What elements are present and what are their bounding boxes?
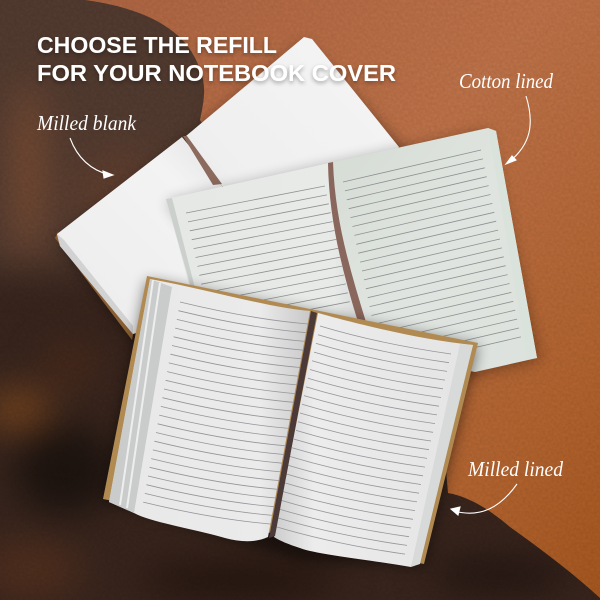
shadow bbox=[57, 42, 405, 342]
kraft cover edge bbox=[55, 232, 134, 340]
dark spine bbox=[269, 311, 317, 538]
right page bbox=[274, 313, 473, 567]
shadow bbox=[103, 280, 478, 566]
arrow: to cotton lined notebook bbox=[506, 96, 530, 164]
label text: Milled lined bbox=[467, 457, 563, 481]
label text: Cotton lined bbox=[459, 69, 553, 93]
right page fore edge bbox=[488, 128, 537, 359]
label text: Milled blank bbox=[36, 111, 137, 135]
right page rules bbox=[274, 326, 451, 554]
label: Cotton lined bbox=[459, 69, 553, 164]
left page rules bbox=[186, 186, 350, 329]
arrow: to milled lined notebook bbox=[451, 484, 517, 515]
label: Milled lined bbox=[451, 457, 563, 515]
right page bbox=[186, 37, 399, 260]
right page stacked edge bbox=[411, 344, 473, 567]
notebook: cotton lined bbox=[166, 128, 540, 376]
left page rules bbox=[143, 302, 308, 524]
leather spine bbox=[328, 162, 366, 322]
title line 2: FOR YOUR NOTEBOOK COVER bbox=[37, 60, 396, 86]
arrow: to milled blank notebook bbox=[70, 138, 113, 178]
left page stacked edge bbox=[109, 279, 172, 513]
left page bbox=[166, 163, 364, 345]
notebook: milled blank bbox=[55, 37, 405, 342]
shadow bbox=[166, 130, 540, 376]
left page edge highlights bbox=[120, 280, 160, 508]
title line 1: CHOOSE THE REFILL bbox=[37, 32, 277, 58]
right page bbox=[329, 128, 537, 372]
leather spine bbox=[183, 136, 222, 185]
page block edge bbox=[57, 234, 133, 334]
left page bbox=[57, 137, 250, 334]
left page bbox=[109, 279, 310, 541]
label: Milled blank bbox=[36, 111, 137, 178]
title bbox=[37, 32, 396, 86]
right page rules bbox=[343, 150, 521, 369]
kraft cover bbox=[103, 276, 478, 564]
left page fore edge bbox=[166, 198, 196, 292]
notebook: milled lined bbox=[103, 276, 478, 567]
